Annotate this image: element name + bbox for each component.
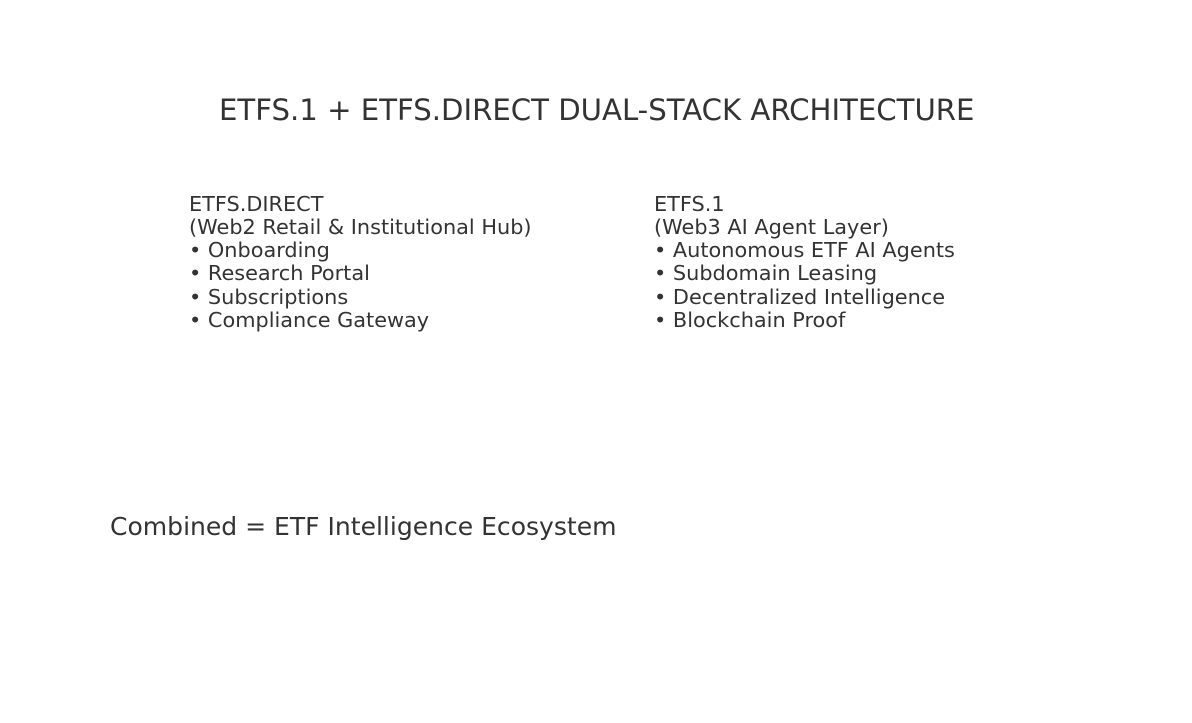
panel: ETFS.DIRECT text block: • Research Portal <box>189 261 370 285</box>
summary caption: Combined = ETF Intelligence Ecosystem <box>110 512 617 541</box>
panel: ETFS.DIRECT text block: • Subscriptions <box>189 285 348 309</box>
title: ETFS.1 + ETFS.DIRECT DUAL-STACK ARCHITECTURE <box>219 93 974 127</box>
panel: ETFS.DIRECT text block: • Compliance Gateway <box>189 308 429 332</box>
panel: ETFS.1 text block: (Web3 AI Agent Layer) <box>654 215 889 239</box>
panel: ETFS.1 text block: ETFS.1 <box>654 192 725 216</box>
panel: ETFS.1 text block: • Decentralized Intelligence <box>654 285 945 309</box>
panel: ETFS.DIRECT text block: (Web2 Retail & Institutional Hub) <box>189 215 532 239</box>
panel: ETFS.1 text block <box>654 192 955 332</box>
panel: ETFS.1 text block: • Autonomous ETF AI Agents <box>654 238 955 262</box>
panel: ETFS.DIRECT text block: • Onboarding <box>189 238 330 262</box>
panel: ETFS.1 text block: • Subdomain Leasing <box>654 261 877 285</box>
panel: ETFS.DIRECT text block: ETFS.DIRECT <box>189 192 323 216</box>
panel: ETFS.DIRECT text block <box>189 192 532 332</box>
panel: ETFS.1 text block: • Blockchain Proof <box>654 308 845 332</box>
